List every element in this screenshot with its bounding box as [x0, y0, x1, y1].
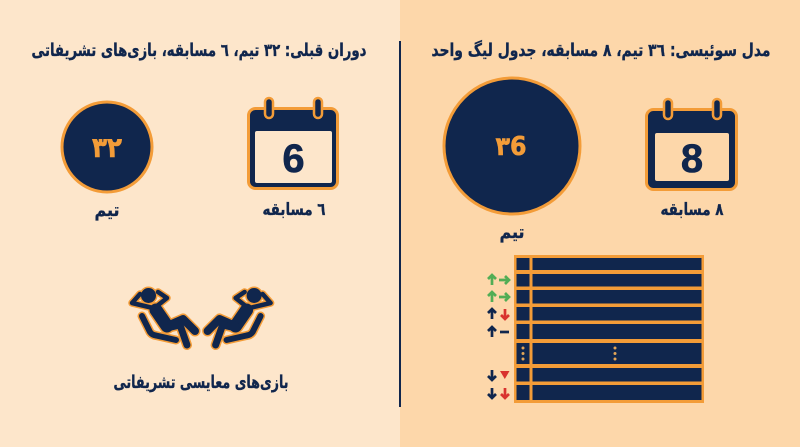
- label: teams: تیم: [500, 222, 524, 243]
- label: 6 matches: ٦ مسابقه: [262, 200, 326, 220]
- icon: calendar 8: [646, 99, 736, 190]
- icon: circle 36 teams: ۳6: [496, 132, 526, 162]
- icon: left relaxing person: [132, 286, 195, 345]
- label: teams: تیم: [94, 200, 120, 221]
- icon: circle 32 teams: ۳۲: [92, 131, 122, 164]
- label: friendly matches: بازی‌های معایسی تشریفاتی: [114, 373, 288, 393]
- icon: circle 36 teams: [444, 78, 580, 214]
- icon: calendar 6: [248, 98, 338, 188]
- icon: circle 32 teams: [62, 102, 152, 192]
- arrows: row 5 down, triangle: [488, 370, 510, 380]
- arrows: row 2 up, right: [488, 292, 509, 302]
- league table: [514, 255, 704, 403]
- heading: swiss model: مدل سوئیسی: ۳٦ تیم، ۸ مسابقه، جدول لیگ واحد: [432, 40, 770, 61]
- heading: previous era: دوران قبلی: ۳۲ تیم، ٦ مسابقه، بازی‌های تشریفاتی: [32, 41, 367, 61]
- movement arrows: [488, 275, 510, 398]
- panel: swiss model: [432, 40, 770, 403]
- icon: two relaxing people: [132, 286, 271, 345]
- icon: right relaxing person: [208, 286, 271, 345]
- icon: calendar 8: 8: [681, 137, 703, 181]
- icon: calendar 6: 6: [282, 137, 305, 181]
- arrows: row 1 up, right: [488, 275, 509, 285]
- arrows: row 3 up, down: [488, 309, 509, 319]
- arrows: row 6 down, down: [488, 388, 509, 398]
- label: 8 matches: ۸ مسابقه: [660, 200, 724, 220]
- panel: previous era: [32, 41, 367, 393]
- arrows: row 4 up, dash: [488, 327, 509, 337]
